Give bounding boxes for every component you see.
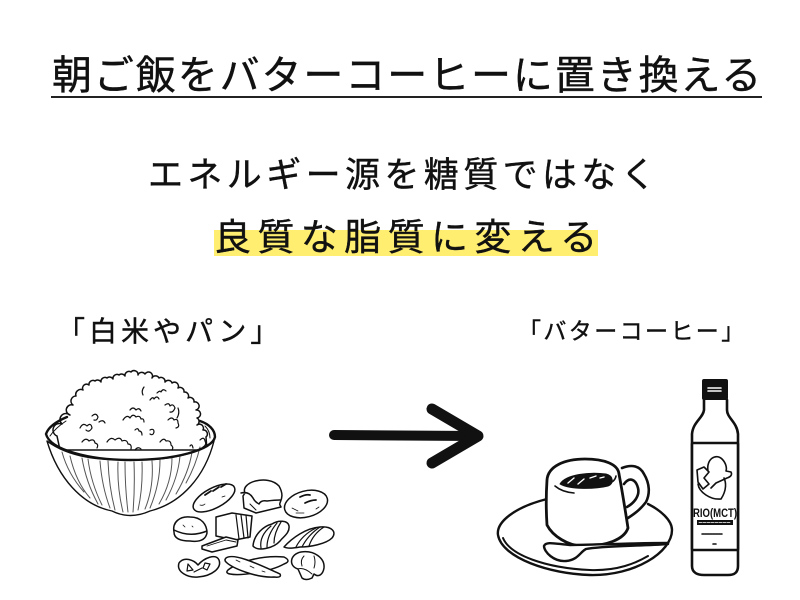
icon: assorted breads xyxy=(174,478,334,580)
bun xyxy=(174,517,207,541)
arrow xyxy=(334,409,478,463)
pretzel xyxy=(179,557,220,577)
baguette roll xyxy=(189,478,239,518)
highlight band xyxy=(214,230,598,256)
icon: MCT oil bottle xyxy=(692,379,738,575)
icon: bowl of rice xyxy=(46,371,215,516)
rice grain clusters xyxy=(80,387,206,450)
handle xyxy=(622,466,649,518)
bowl stripes xyxy=(62,447,200,512)
brand text: RIO(MCT) xyxy=(693,506,737,520)
rice mound xyxy=(53,371,207,450)
label: butter coffee: 「バターコーヒー」 xyxy=(518,318,747,344)
spoon xyxy=(544,543,668,561)
label xyxy=(692,443,738,550)
sliced roll A xyxy=(253,521,289,549)
subheading line 2: 良質な脂質に変える xyxy=(214,217,604,258)
baguettes xyxy=(225,557,288,577)
sliced bread xyxy=(202,513,252,552)
title underline xyxy=(51,96,762,98)
icon: coffee cup on saucer xyxy=(498,459,672,575)
bowl rim xyxy=(46,417,215,460)
cup body xyxy=(546,459,628,546)
saucer xyxy=(498,499,672,575)
loaf with bite xyxy=(241,480,282,513)
bottle outline xyxy=(692,400,738,575)
title: 朝ご飯をバターコーヒーに置き換える xyxy=(52,54,763,98)
subheading line 1: エネルギー源を糖質ではなく xyxy=(148,156,660,195)
character drawing xyxy=(697,457,732,499)
cap xyxy=(702,379,728,400)
round loaf xyxy=(281,486,331,522)
label: rice and bread: 「白米やパン」 xyxy=(57,316,282,347)
label band xyxy=(697,520,733,525)
muffin xyxy=(292,552,324,580)
bowl body xyxy=(47,441,214,516)
sliced roll B xyxy=(284,527,334,548)
coffee surface xyxy=(560,473,612,488)
